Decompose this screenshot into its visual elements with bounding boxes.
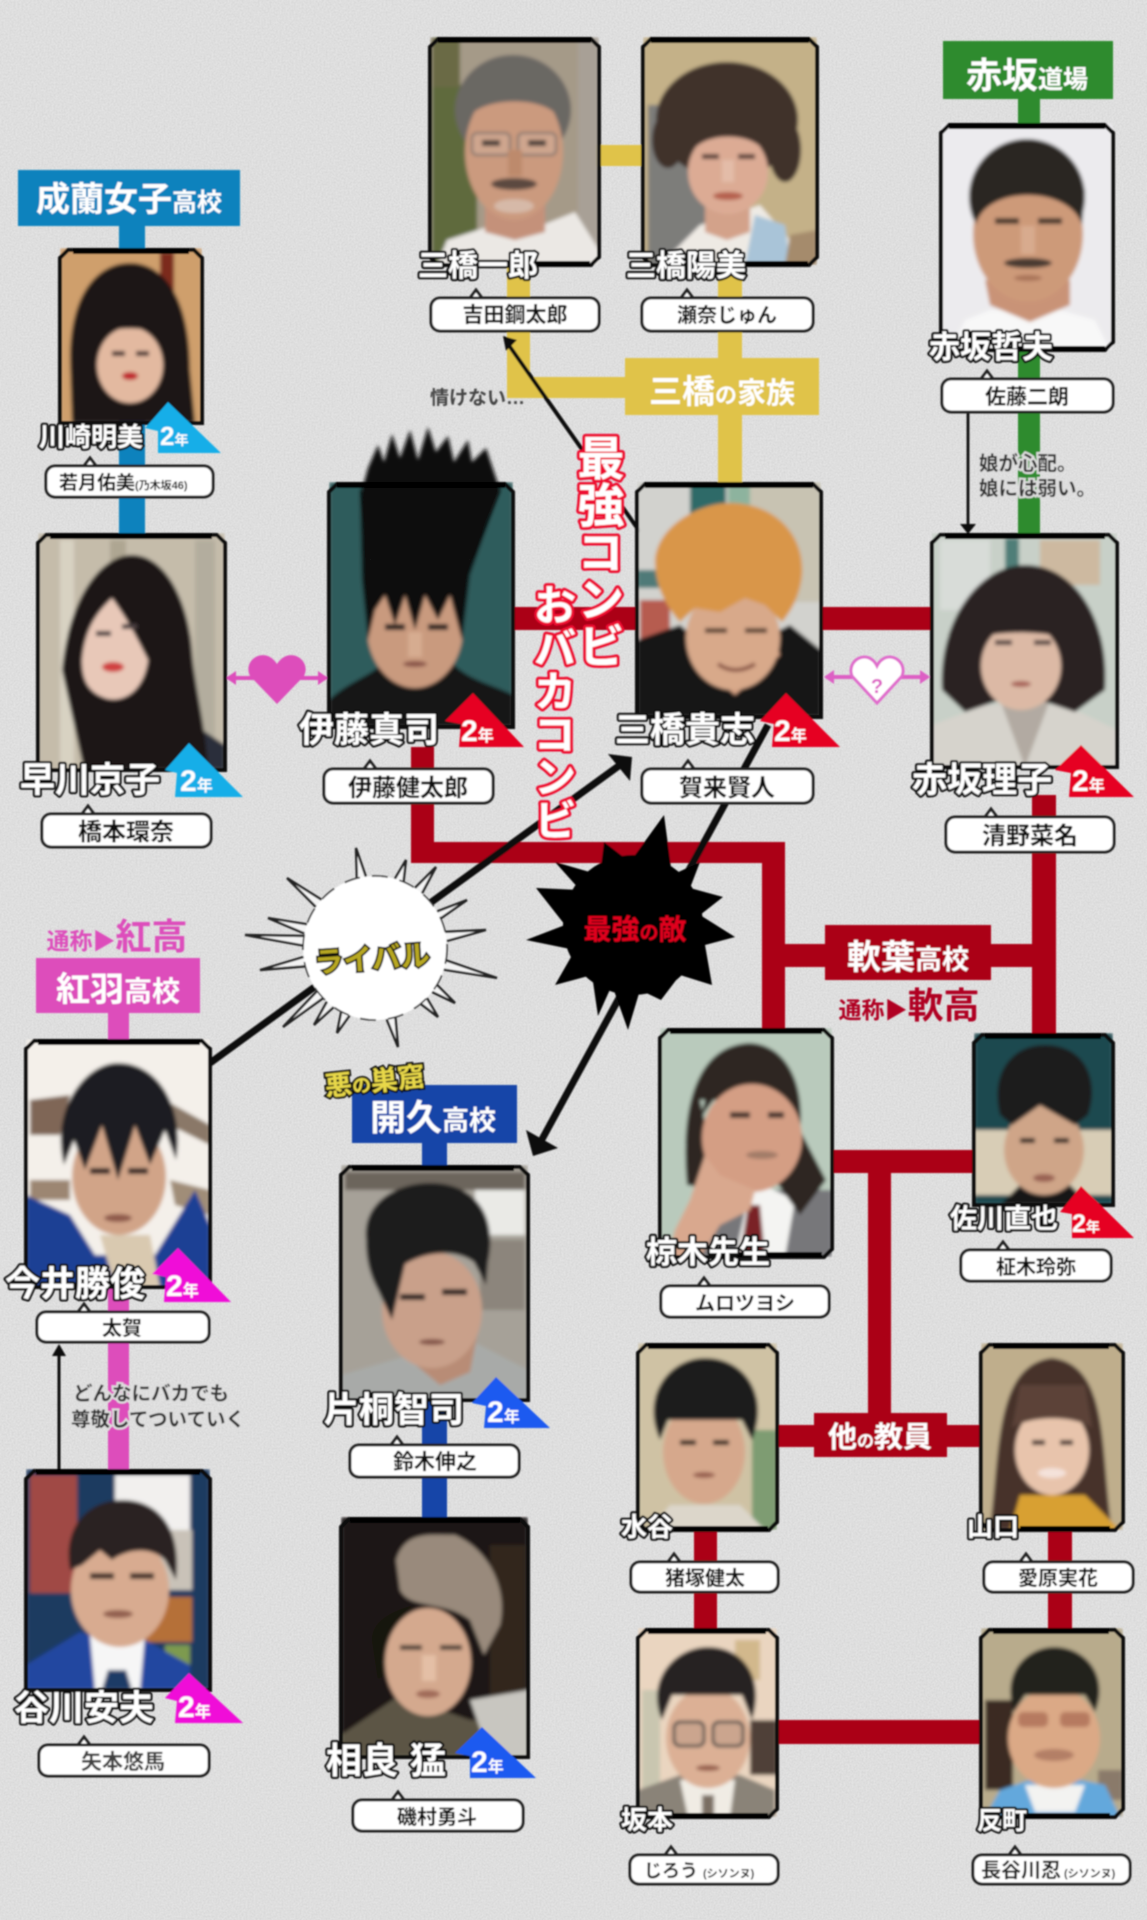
- frame: [430, 37, 599, 266]
- frame: [643, 37, 817, 266]
- burst: ライバル: [245, 848, 497, 1047]
- character: 三橋一郎: [418, 37, 599, 331]
- note: どんなにバカでも: どんなにバカでも: [73, 1383, 229, 1405]
- frame: [26, 1469, 210, 1690]
- actor pill: じろう (シソンヌ): [644, 1861, 755, 1881]
- character: 今井勝俊: [5, 1039, 231, 1342]
- character: 三橋陽美: [626, 37, 817, 331]
- actor pill: [353, 1792, 523, 1831]
- actor pill: [630, 1847, 778, 1884]
- grade badge: 2年: [471, 1746, 504, 1779]
- portrait: 赤坂理子: [930, 532, 1118, 766]
- name: 谷川安夫: [14, 1689, 154, 1728]
- note: 通称 紅高: 通称▶紅高: [46, 916, 188, 957]
- grade badge: 2年: [774, 715, 807, 748]
- actor pill: 鈴木伸之: [393, 1451, 477, 1474]
- kaikyu connector line: [422, 1143, 447, 1517]
- name: 水谷: [621, 1512, 673, 1542]
- frame: [329, 482, 513, 727]
- grade badge: [472, 1377, 550, 1429]
- spiky hair: [362, 427, 500, 560]
- portrait: 川崎明美: [58, 247, 204, 422]
- burst: 最強の敵: 最強の敵: [583, 914, 687, 945]
- actor pill: [431, 290, 599, 331]
- actor pill: 太賀: [102, 1317, 142, 1340]
- name: 川崎明美: [39, 422, 143, 452]
- character: 早川京子: [20, 533, 243, 847]
- character: 椋木先生: [646, 1028, 832, 1317]
- grade badge: [165, 743, 243, 798]
- frame: [638, 1628, 777, 1818]
- character: 谷川安夫: [14, 1469, 243, 1776]
- note: 情けない: 情けない…: [430, 387, 525, 409]
- actor pill: 伊藤健太郎: [348, 775, 468, 802]
- frame: [637, 482, 821, 717]
- portrait: 相良猛: [340, 1516, 529, 1756]
- frame: [26, 1039, 210, 1287]
- name: 伊藤真司: [299, 711, 439, 750]
- actor pill: 柾木玲弥: [996, 1256, 1076, 1279]
- frame: [60, 248, 202, 423]
- actor pill: [324, 761, 493, 803]
- actor pill: 賀来賢人: [679, 775, 775, 802]
- heading: 三橋の家族: 三橋の家族: [649, 373, 795, 410]
- actor pill: 愛原実花: [1018, 1567, 1098, 1590]
- arrow: 谷川 to 今井: [52, 1344, 66, 1469]
- family connector lines: [507, 145, 742, 482]
- name: 赤坂理子: [912, 761, 1052, 800]
- frame: [341, 1165, 528, 1400]
- heading: 軟葉高校: 軟葉高校: [847, 939, 969, 977]
- grade badge: 2年: [180, 765, 213, 798]
- grade badge: 2年: [1072, 1210, 1100, 1238]
- character: 赤坂哲夫: [929, 123, 1113, 412]
- portrait: 反町: [980, 1628, 1124, 1818]
- actor pill: [946, 809, 1114, 852]
- arrow: rivals: [210, 754, 632, 1063]
- heart link: 三橋 and 理子: [824, 657, 930, 703]
- character: 片桐智司: [324, 1165, 550, 1477]
- name: 三橋一郎: [418, 250, 538, 283]
- actor pill: ムロツヨシ: [695, 1293, 795, 1315]
- benio school connector line: [108, 1013, 129, 1469]
- grade badge: 2年: [461, 715, 494, 748]
- actor pill: [642, 290, 813, 331]
- burst: ライバル: ライバル: [313, 940, 431, 980]
- actor pill: 磯村勇斗: [397, 1806, 477, 1829]
- girls school connector line: [119, 226, 145, 533]
- heart link: 三橋 and 理子: ?: [871, 676, 883, 698]
- portrait: 坂本: [636, 1628, 778, 1818]
- portrait: 三橋貴志: [636, 482, 822, 716]
- grade badge: 2年: [166, 1270, 199, 1303]
- name: 今井勝俊: [5, 1265, 145, 1304]
- actor pill: [642, 761, 813, 803]
- actor pill: 若月佑美(乃木坂46): [59, 472, 188, 494]
- portrait: 水谷: [636, 1342, 778, 1531]
- grade badge: [760, 693, 840, 748]
- character: 坂本: [621, 1628, 778, 1884]
- note: 通称 軟高: 通称▶軟高: [838, 985, 980, 1026]
- grade badge: 2年: [178, 1691, 211, 1724]
- portrait: 今井勝俊: [24, 1038, 212, 1286]
- vertical label: おバカコンビ: おバカコンビ: [527, 583, 575, 841]
- grade badge: [445, 693, 524, 748]
- note: どんなにバカでも: 尊敬してついていく: [71, 1409, 245, 1431]
- dojo connector line: [1018, 99, 1040, 535]
- name: 片桐智司: [324, 1391, 464, 1430]
- actor pill: 橋本環奈: [78, 819, 174, 846]
- heading: 成蘭女子高校: 成蘭女子高校: [36, 181, 222, 219]
- frame: [932, 533, 1117, 767]
- actor pill: [961, 1242, 1111, 1281]
- actor pill: [973, 1847, 1130, 1884]
- name: 相良 猛: [326, 1740, 446, 1781]
- heading: 三橋の家族: [625, 358, 819, 415]
- note: 娘が心配: 娘には弱い。: [979, 478, 1096, 500]
- frame: [341, 1517, 528, 1757]
- grade badge: 2年: [1072, 765, 1105, 798]
- heading: 成蘭女子高校: [18, 170, 240, 226]
- portrait: 片桐智司: [340, 1164, 529, 1400]
- frame: [941, 123, 1113, 351]
- portrait: 山口: [980, 1342, 1124, 1531]
- portrait: 三橋陽美: [642, 36, 818, 266]
- grade badge: [165, 1673, 243, 1724]
- frame: [981, 1628, 1123, 1818]
- grade badge: [1060, 1186, 1134, 1238]
- actor pill: 矢本悠馬: [81, 1751, 165, 1774]
- actor pill: 清野菜名: [982, 823, 1078, 850]
- note: どんなにバカでも: [71, 1383, 245, 1431]
- character: 水谷: [621, 1343, 778, 1592]
- heading: 開久高校: [352, 1085, 517, 1143]
- frame: [974, 1033, 1113, 1205]
- name: 早川京子: [20, 761, 160, 800]
- nanyo school connector lines: [411, 607, 1072, 1744]
- grade badge: 2年: [160, 421, 188, 451]
- name: 椋木先生: [646, 1235, 770, 1270]
- character: 反町: [973, 1628, 1130, 1884]
- character: 相良猛: [326, 1517, 536, 1831]
- frame: [38, 533, 225, 770]
- note: 娘が心配: 娘が心配。: [979, 452, 1077, 475]
- arrow: strongest enemy: [526, 725, 768, 1156]
- actor pill: 吉田鋼太郎: [462, 304, 568, 327]
- heading: 赤坂道場: [943, 41, 1113, 99]
- grade badge: [145, 402, 221, 453]
- grade badge: [1055, 745, 1134, 798]
- character: 三橋貴志: [615, 482, 840, 803]
- arrow: 三橋貴志 to 吉田: [503, 336, 640, 532]
- heading: 赤坂道場: 赤坂道場: [966, 55, 1088, 96]
- portrait: 椋木先生: [659, 1028, 833, 1258]
- heading: 他の教員: 他の教員: [828, 1421, 932, 1454]
- note: 娘が心配: [979, 452, 1096, 500]
- portrait: 谷川安夫: [25, 1468, 211, 1690]
- actor pill: [46, 458, 213, 497]
- frame: [981, 1343, 1123, 1531]
- actor pill: [37, 1304, 209, 1342]
- character: 佐川直也: [950, 1033, 1134, 1281]
- character: 山口: [967, 1343, 1133, 1592]
- character: 伊藤真司: [299, 427, 524, 803]
- actor pill: [631, 1554, 778, 1592]
- actor pill: [661, 1278, 829, 1317]
- name: 山口: [967, 1512, 1019, 1542]
- actor pill: 長谷川忍 (シソンヌ): [981, 1859, 1116, 1882]
- heart link: 早川 and 伊藤: [226, 655, 328, 704]
- character: 川崎明美: [39, 248, 221, 497]
- actor pill: [39, 1737, 209, 1776]
- name: 赤坂哲夫: [929, 330, 1053, 365]
- heading: 紅羽高校: 紅羽高校: [56, 971, 180, 1009]
- character: 赤坂理子: [912, 533, 1134, 852]
- name: 三橋貴志: [615, 711, 755, 750]
- frame: [660, 1028, 832, 1257]
- name: 佐川直也: [950, 1204, 1058, 1234]
- heading: 開久高校: 開久高校: [370, 1097, 496, 1138]
- actor pill: 瀬奈じゅん: [677, 304, 777, 327]
- note: 悪の巣窟: 悪の巣窟: [323, 1062, 426, 1102]
- actor pill: 猪塚健太: [665, 1567, 745, 1590]
- portrait: 早川京子: [37, 532, 226, 770]
- portrait: 三橋一郎: [428, 36, 600, 266]
- heading: 紅羽高校: [36, 958, 200, 1013]
- actor pill: 佐藤二朗: [985, 386, 1069, 409]
- burst: 最強の敵: [526, 815, 735, 1030]
- actor pill: [42, 806, 211, 847]
- heading: 他の教員: [814, 1413, 947, 1457]
- frame: [638, 1343, 777, 1531]
- portrait: 伊藤真司: [328, 481, 514, 726]
- name: 反町: [977, 1807, 1027, 1835]
- vertical label: 最強コンビ: 最強コンビ: [570, 434, 624, 669]
- heading: 軟葉高校: [825, 925, 991, 980]
- arrow: 赤坂哲夫 to 理子: [960, 413, 976, 534]
- portrait: 赤坂哲夫: [940, 122, 1114, 352]
- actor pill: [350, 1437, 519, 1477]
- grade badge: 2年: [487, 1396, 520, 1429]
- portrait: 佐川直也: [973, 1032, 1114, 1204]
- name: 坂本: [621, 1805, 673, 1835]
- grade badge: [152, 1248, 231, 1303]
- actor pill: [942, 371, 1113, 412]
- actor pill: [984, 1554, 1133, 1592]
- name: 三橋陽美: [626, 250, 746, 283]
- grade badge: [455, 1727, 536, 1779]
